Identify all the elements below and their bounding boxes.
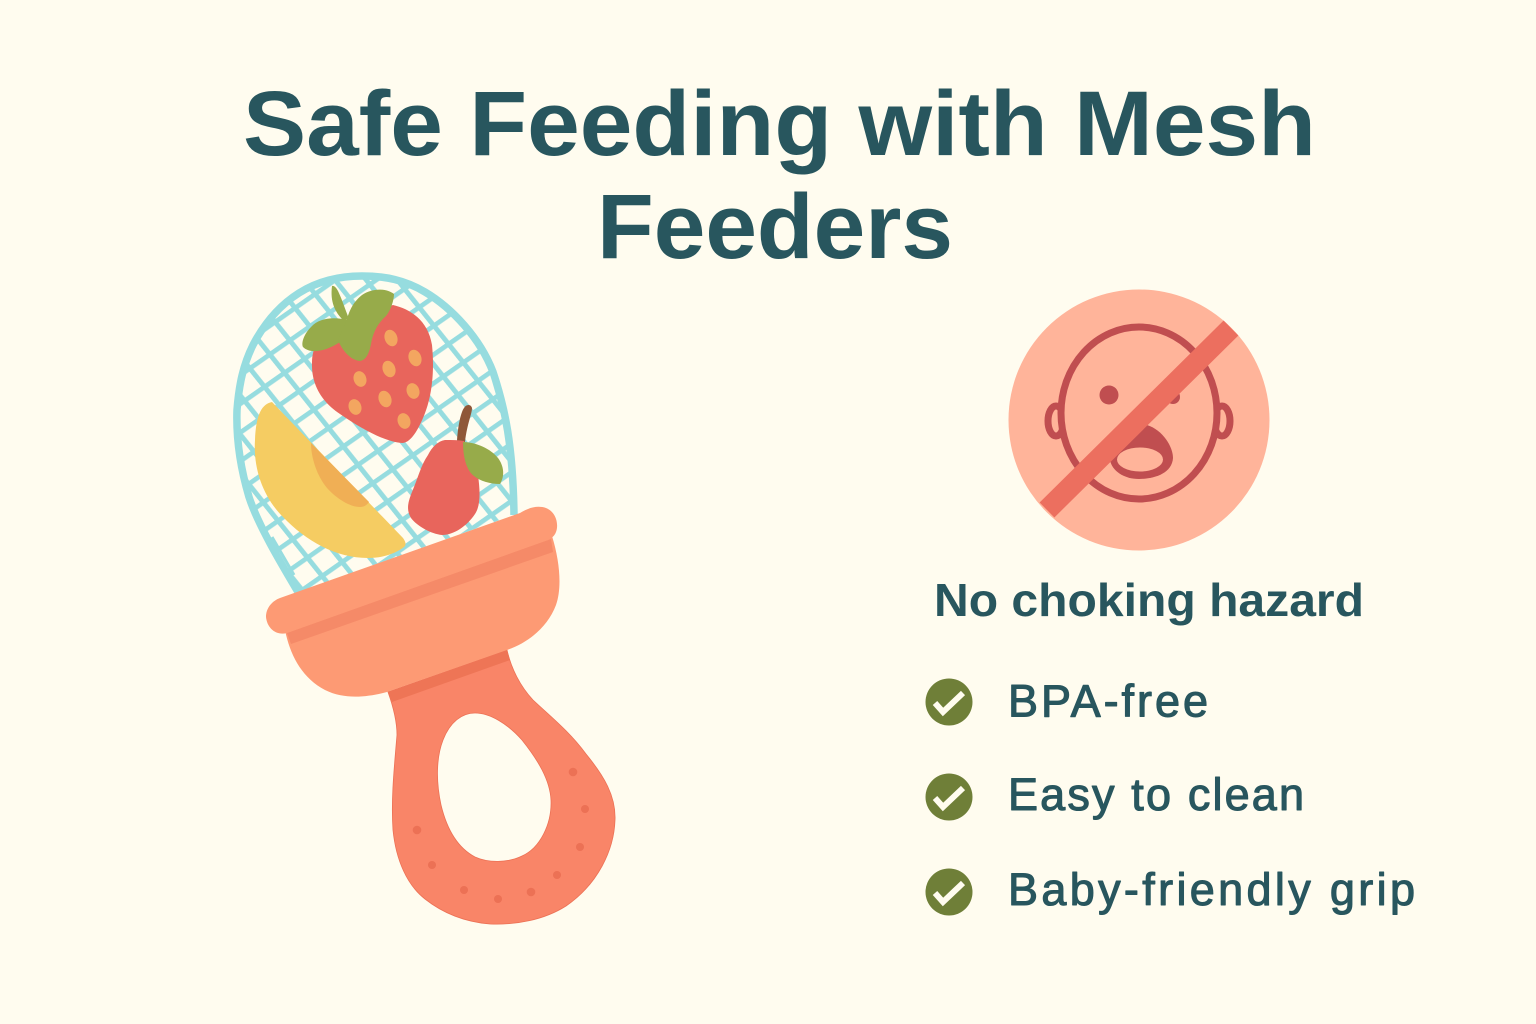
title: Feeders	[597, 176, 953, 278]
check icon	[926, 774, 972, 820]
list item: BPA-free: BPA-free	[1008, 676, 1208, 726]
handle grip dots	[413, 768, 589, 903]
list item: easy to clean: Easy to clean	[1008, 769, 1304, 820]
mesh bag	[237, 276, 514, 592]
check icon	[926, 678, 972, 726]
fruit: strawberry	[302, 286, 433, 443]
silicone cup and rim	[266, 507, 559, 697]
heading: no choking hazard: No choking hazard	[934, 574, 1364, 626]
strawberry leaves	[302, 286, 394, 361]
fruit: melon slice	[255, 402, 406, 558]
list item: baby-friendly grip: Baby-friendly grip	[1008, 864, 1415, 915]
prohibition slash	[1047, 328, 1231, 510]
baby face	[1048, 327, 1230, 499]
handle ring	[388, 650, 615, 924]
check icon	[926, 868, 972, 916]
strawberry seeds	[346, 328, 424, 431]
title: Safe Feeding with Mesh	[243, 73, 1316, 175]
illustration: mesh feeder	[237, 276, 615, 924]
fruit: pear	[408, 405, 503, 535]
icon: no choking hazard	[1008, 290, 1270, 550]
title	[243, 73, 1316, 278]
